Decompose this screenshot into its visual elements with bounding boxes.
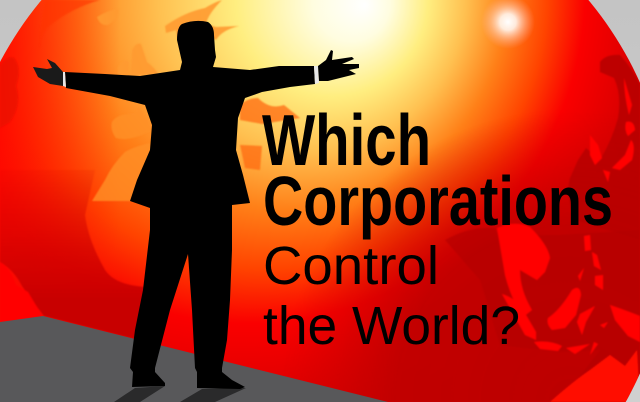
land: south america bbox=[8, 272, 42, 320]
land: philippines bbox=[578, 235, 603, 290]
land: japan bbox=[590, 78, 635, 182]
floor bbox=[0, 316, 388, 402]
land: asia dark lower bbox=[446, 228, 639, 300]
land: borneo bbox=[548, 288, 581, 330]
land: africa orange bbox=[92, 116, 150, 202]
land: left edge bbox=[0, 57, 19, 128]
land: upper left streak bbox=[52, 0, 100, 23]
globe left edge tint bbox=[0, 0, 120, 330]
land: asia dark upper right bbox=[568, 55, 640, 240]
land: south east asia bbox=[497, 224, 550, 318]
title: the World?: the World? bbox=[263, 296, 520, 356]
title: Control: Control bbox=[263, 236, 439, 296]
glare highlight bbox=[481, 0, 535, 49]
silhouette: left cuff bbox=[63, 72, 66, 87]
silhouette: right cuff bbox=[314, 66, 319, 84]
floor shadows bbox=[114, 386, 246, 402]
land: north europe orange bbox=[97, 0, 239, 75]
land: australia bbox=[550, 350, 640, 402]
title bbox=[262, 101, 613, 356]
silhouette: right hand bbox=[318, 50, 359, 81]
ocean: dark lower right bbox=[312, 130, 640, 402]
silhouette: body bbox=[65, 21, 315, 389]
land: sumatra java bbox=[502, 294, 598, 355]
silhouette: left hand bbox=[33, 59, 63, 86]
land: middle east orange bbox=[240, 98, 300, 170]
ocean: dark atlantic bbox=[0, 170, 145, 340]
silhouette: man with outstretched arms bbox=[33, 21, 359, 389]
title: Which: Which bbox=[262, 101, 431, 181]
land: indonesia bbox=[577, 305, 640, 342]
